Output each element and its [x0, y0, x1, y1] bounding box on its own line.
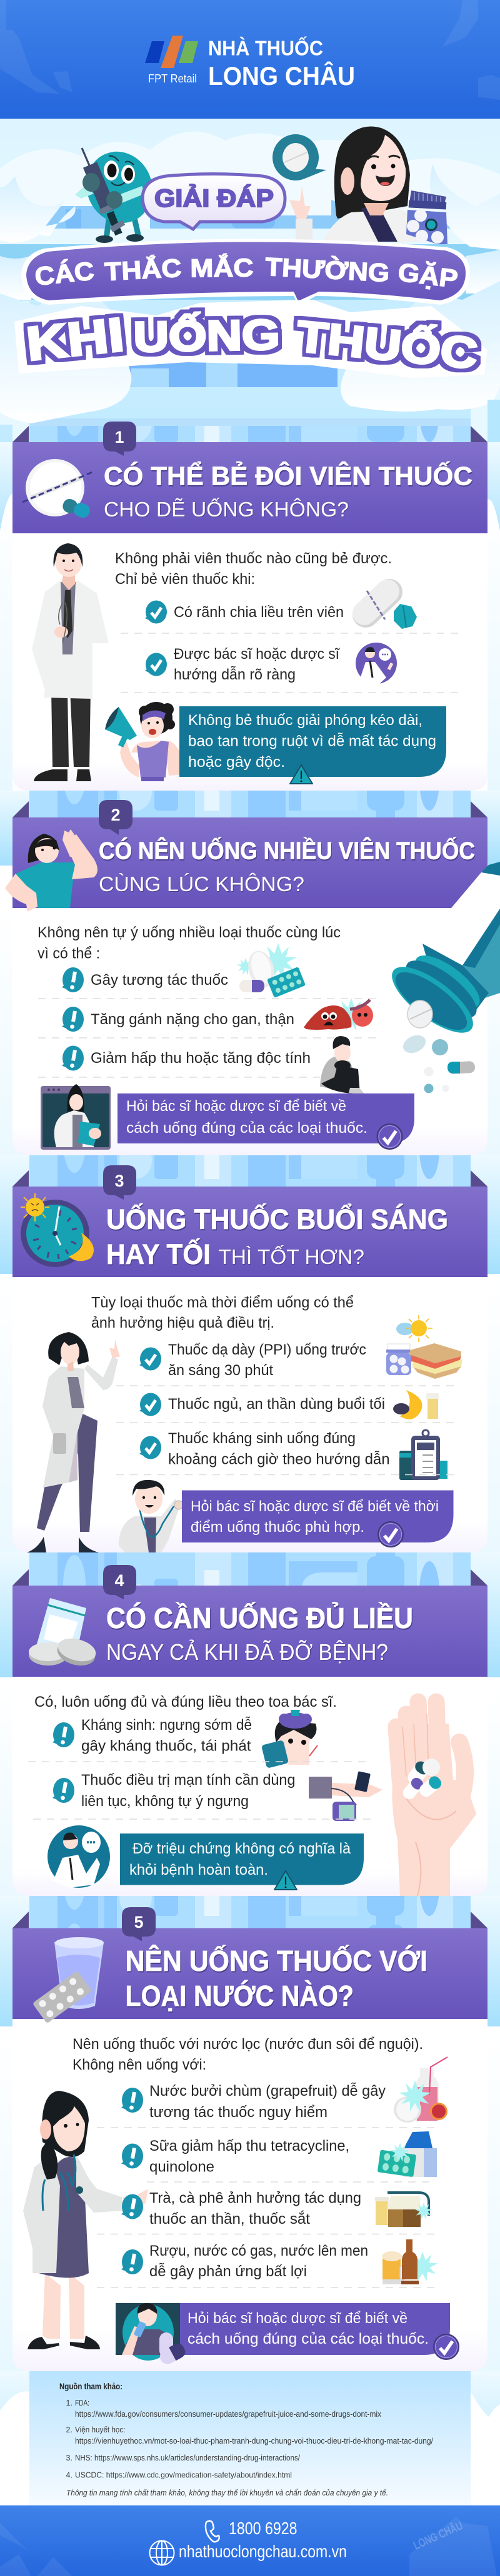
- illustration: sick man with ice bag: [261, 1710, 318, 1769]
- references panel: https://www.fda.gov/consumers/consumer-updates/grapefruit-juice-and-some-drugs-dont-mix: [75, 2410, 382, 2419]
- footer band: [0, 2505, 500, 2576]
- illustration: small doctor with stethoscope: [119, 1480, 183, 1552]
- logo: FPT Retail: FPT Retail: [148, 72, 197, 85]
- intro text 2: [38, 924, 341, 962]
- icon: teal doctor circle: [48, 1825, 110, 1888]
- callout: hỏi bác sĩ (3): [182, 1490, 454, 1547]
- illustration: female doctor pointing: [27, 1332, 120, 1552]
- callout: hỏi bác sĩ (3): Hỏi bác sĩ hoặc dược sĩ để biết về thời: [191, 1498, 439, 1515]
- callout: hỏi bác sĩ (2): cách uống đúng của các loại thuốc.: [126, 1120, 368, 1137]
- list item: rãnh chia liều: [145, 601, 344, 623]
- callout: hỏi bác sĩ (5): cách uống đúng của các loại thuốc.: [188, 2331, 429, 2347]
- intro text 2: Không nên tự ý uống nhiều loại thuốc cùng lúc: [38, 924, 341, 941]
- callout: hỏi bác sĩ (5): Hỏi bác sĩ hoặc dược sĩ để biết về: [188, 2310, 408, 2327]
- intro text 1: [115, 550, 392, 588]
- icon: clock with sun and moon: [21, 1193, 94, 1267]
- illustration: blood pressure cuff: [309, 1771, 382, 1821]
- intro text 5: Không nên uống với:: [72, 2056, 206, 2073]
- phone number: 1800 6928: [229, 2519, 298, 2538]
- list item: tương tác thuốc: [62, 967, 228, 992]
- panel 5: loại nước nào: [12, 1907, 488, 2371]
- dashed dividers: [38, 999, 378, 1077]
- callout: không bẻ thuốc giải phóng kéo dài: bao tan trong ruột vì dễ mất tác dụng: [188, 733, 436, 749]
- heading 3: THÌ TỐT HƠN?: [219, 1245, 364, 1268]
- illustration: pill character with syringe: [75, 142, 163, 243]
- list item: sữa: quinolone: [149, 2158, 214, 2176]
- number badge 1: [103, 422, 136, 456]
- title banner: CÁC THẮC MẮC THƯỜNG GẶP: THƯỜNG: [264, 252, 390, 287]
- list item: độc tính: [62, 1045, 311, 1070]
- references panel: https://vienhuyethoc.vn/mot-so-loai-thuc-pham-tranh-dung-chung-voi-thuoc-dieu-tri-de-khong-mat-tac-dung/: [75, 2437, 433, 2445]
- logo: FPT Retail: [145, 36, 198, 85]
- list item: kháng sinh: khoảng cách giờ theo hướng dẫn: [168, 1451, 390, 1468]
- dashed dividers: [97, 2128, 436, 2287]
- brand name: [208, 36, 355, 91]
- number badge 3: 3: [114, 1172, 124, 1190]
- intro text 4: Có, luôn uống đủ và đúng liều theo toa bác sĩ.: [34, 1694, 337, 1710]
- title banner: CÁC THẮC MẮC THƯỜNG GẶP: [21, 239, 470, 306]
- illustration: open hand with pills: [392, 1702, 476, 1896]
- intro text 1: Không phải viên thuốc nào cũng bẻ được.: [115, 550, 392, 567]
- references panel: 4.: [66, 2470, 72, 2479]
- number badge 1: 1: [114, 428, 124, 447]
- icon: coffee pot and vial: [375, 2193, 432, 2227]
- number badge 4: 4: [114, 1571, 124, 1590]
- badge: GIẢI ĐÁP: GIẢI ĐÁP: [154, 184, 274, 212]
- list item: thuốc ngủ: [139, 1393, 385, 1416]
- list item: kháng sinh ngưng sớm: Kháng sinh: ngưng sớm dễ: [81, 1717, 252, 1734]
- list item: kháng sinh: [139, 1430, 390, 1468]
- list item: trà cà phê: [121, 2189, 361, 2228]
- heading 4: [106, 1602, 413, 1665]
- main title: KHI UỐNG THUỐC: [14, 300, 488, 378]
- icon: glass of water and blister: [32, 1937, 104, 2023]
- intro text 3: Tùy loại thuốc mà thời điểm uống có thể: [91, 1294, 354, 1311]
- callout: không bẻ thuốc giải phóng kéo dài: Không bẻ thuốc giải phóng kéo dài,: [188, 712, 422, 729]
- callout: hỏi bác sĩ (2): [118, 1093, 414, 1149]
- references panel: FDA:: [75, 2399, 89, 2407]
- icon: sun, bottle and sandwich: [386, 1315, 462, 1379]
- list item: bưởi chùm: tương tác thuốc nguy hiểm: [149, 2104, 328, 2121]
- references panel: Nguồn tham khảo:: [59, 2381, 122, 2391]
- list item: bệnh mạn tính: [52, 1772, 295, 1810]
- number badge 4: [103, 1565, 136, 1599]
- references panel: NHS: https://www.sps.nhs.uk/articles/understanding-drug-interactions/: [75, 2454, 300, 2462]
- illustration: woman with megaphone: [105, 702, 185, 781]
- list item: bưởi chùm: Nước bưởi chùm (grapefruit) dễ gây: [149, 2083, 386, 2100]
- icon: interacting pills: [237, 943, 306, 998]
- intro text 3: [91, 1294, 354, 1331]
- number badge 2: 2: [111, 806, 121, 824]
- main title: KHI UỐNG THUỐC: UỐNG: [133, 310, 280, 361]
- list item: trà cà phê: Trà, cà phê ảnh hưởng tác dụng: [149, 2189, 361, 2207]
- number badge 3: [103, 1165, 136, 1200]
- title banner: CÁC THẮC MẮC THƯỜNG GẶP: GẶP: [396, 257, 459, 294]
- panel 2: uống nhiều viên thuốc: [5, 800, 488, 1155]
- list item: bác sĩ hướng dẫn: Được bác sĩ hoặc dược sĩ: [174, 646, 340, 663]
- dashed dividers: [116, 1386, 456, 1475]
- heading 2: CÙNG LÚC KHÔNG?: [99, 872, 304, 896]
- callout: đỡ triệu chứng: [120, 1833, 364, 1890]
- heading 5: NÊN UỐNG THUỐC VỚI: [125, 1945, 428, 1977]
- illustration: tipped bottle with pills: [382, 862, 500, 1093]
- references panel: USCDC: https://www.cdc.gov/medication-safety/about/index.html: [75, 2470, 292, 2479]
- list item: trà cà phê: thuốc an thần, thuốc sắt: [149, 2211, 310, 2228]
- badge: GIẢI ĐÁP: [142, 174, 285, 229]
- icon: split tablet and capsule: [22, 459, 94, 520]
- list item: PPI: [139, 1341, 366, 1379]
- list item: gan thận: [62, 1007, 294, 1032]
- list item: kháng sinh: Thuốc kháng sinh uống đúng: [168, 1430, 356, 1447]
- main title: KHI UỐNG THUỐC: KHI: [24, 308, 126, 371]
- callout: đỡ triệu chứng: Đỡ triệu chứng không có nghĩa là: [132, 1840, 351, 1857]
- list item: bác sĩ hướng dẫn: [145, 646, 340, 683]
- icon: globe: [150, 2540, 174, 2565]
- list item: rãnh chia liều: Có rãnh chia liều trên viên: [174, 604, 344, 621]
- illustration: pharmacist woman: [289, 126, 431, 242]
- list item: bệnh mạn tính: liên tục, không tự ý ngưng: [81, 1793, 249, 1810]
- icon: milk carton and blister: [378, 2131, 437, 2177]
- heading 3: [106, 1203, 448, 1270]
- list item: sữa: Sữa giảm hấp thu tetracycline,: [149, 2138, 349, 2154]
- shop sign: LONG CHÂU: [411, 2519, 465, 2553]
- list item: kháng sinh ngưng sớm: [52, 1717, 252, 1755]
- references panel: 1.: [66, 2399, 72, 2407]
- heading 3: HAY TỐI: [106, 1238, 211, 1270]
- heading 4: CÓ CẦN UỐNG ĐỦ LIỀU: [106, 1602, 413, 1634]
- heading 2: [99, 837, 475, 896]
- references panel: Viện huyết học:: [75, 2425, 125, 2434]
- list item: PPI: Thuốc dạ dày (PPI) uống trước: [168, 1341, 366, 1358]
- list item: gan thận: Tăng gánh nặng cho gan, thận: [91, 1011, 294, 1028]
- dashed dividers: [28, 1762, 372, 1819]
- icon: clipboard and medicine: [399, 1430, 448, 1480]
- references panel: [29, 2371, 471, 2505]
- brand name: LONG CHÂU: [208, 61, 355, 91]
- intro text 1: Chỉ bẻ viên thuốc khi:: [115, 571, 255, 588]
- number badge 5: 5: [134, 1913, 144, 1932]
- heading 5: LOẠI NƯỚC NÀO?: [125, 1980, 354, 2012]
- callout: hỏi bác sĩ (5): [116, 2303, 459, 2367]
- website: nhathuoclongchau.com.vn: [179, 2542, 347, 2561]
- list item: thuốc ngủ: Thuốc ngủ, an thần dùng buổi tối: [168, 1396, 385, 1413]
- list item: tương tác thuốc: Gây tương tác thuốc: [91, 972, 228, 989]
- icon: beer and bottle: [382, 2239, 438, 2284]
- header band: [0, 0, 500, 119]
- panel 3: buổi sáng hay tối: [12, 1165, 488, 1552]
- list item: rượu: dễ gây phản ứng bất lợi: [149, 2263, 307, 2280]
- heading 1: CÓ THỂ BẺ ĐÔI VIÊN THUỐC: [104, 461, 472, 491]
- list item: kháng sinh ngưng sớm: gây kháng thuốc, tái phát: [81, 1737, 251, 1755]
- panel 1: bẻ đôi viên thuốc: [12, 422, 488, 791]
- list item: bệnh mạn tính: Thuốc điều trị mạn tính cần dùng: [81, 1772, 295, 1789]
- dashed dividers: [121, 633, 461, 693]
- heading 3: UỐNG THUỐC BUỔI SÁNG: [106, 1203, 448, 1235]
- brand name: NHÀ THUỐC: [208, 36, 323, 60]
- callout: hỏi bác sĩ (2): Hỏi bác sĩ hoặc dược sĩ để biết về: [126, 1098, 346, 1115]
- illustration: male doctor: [32, 543, 109, 781]
- illustration: doctor woman presenting: [23, 2091, 148, 2349]
- list item: rượu: Rượu, nước có gas, nước lên men: [149, 2243, 368, 2259]
- heading 4: NGAY CẢ KHI ĐÃ ĐỠ BỆNH?: [106, 1639, 388, 1665]
- callout: không bẻ thuốc giải phóng kéo dài: [179, 706, 446, 784]
- references panel: 3.: [66, 2454, 72, 2462]
- list item: rượu: [121, 2243, 368, 2280]
- illustration: pill bottle: [406, 190, 448, 244]
- icon: medicine bag and tablets: [29, 1598, 98, 1669]
- intro text 3: ảnh hưởng hiệu quả điều trị.: [91, 1315, 274, 1331]
- speech bubble: pill: [272, 134, 326, 180]
- number badge 5: [122, 1907, 156, 1941]
- heading 1: CHO DẼ UỐNG KHÔNG?: [104, 497, 349, 521]
- title banner: CÁC THẮC MẮC THƯỜNG GẶP: CÁC: [33, 256, 96, 291]
- illustration: woman raising hand: [5, 829, 98, 912]
- references panel: 2.: [66, 2425, 72, 2434]
- number badge 2: [99, 800, 132, 835]
- icon: phone: [206, 2521, 219, 2542]
- callout: đỡ triệu chứng: khỏi bệnh hoàn toàn.: [129, 1862, 268, 1878]
- list item: sữa: [121, 2138, 349, 2176]
- intro text 5: [72, 2036, 423, 2073]
- intro text 5: Nên uống thuốc với nước lọc (nước đun sôi để nguội).: [72, 2036, 423, 2053]
- title banner: CÁC THẮC MẮC THƯỜNG GẶP: THẮC: [104, 254, 182, 286]
- callout: không bẻ thuốc giải phóng kéo dài: hoặc gây độc.: [188, 754, 285, 771]
- title banner: CÁC THẮC MẮC THƯỜNG GẶP: MẮC: [190, 254, 254, 282]
- illustration: tablet doctor: [41, 1084, 111, 1150]
- icon: scored tablet: [364, 591, 417, 629]
- panel 4: uống đủ liều: [12, 1565, 488, 1896]
- icon: doctor in circle: [356, 643, 397, 684]
- list item: độc tính: Giảm hấp thu hoặc tăng độc tính: [91, 1050, 311, 1067]
- intro text 2: vì có thể :: [38, 945, 100, 962]
- references panel: Thông tin mang tính chất tham khảo, không thay thế lời khuyên và chẩn đoán của chuyên gia y tế.: [66, 2489, 388, 2497]
- icon: grapefruit juice: [394, 2057, 448, 2123]
- icon: moon and vial: [393, 1390, 439, 1419]
- list item: bưởi chùm: [121, 2083, 386, 2121]
- list item: PPI: ăn sáng 30 phút: [168, 1362, 273, 1379]
- main title: KHI UỐNG THUỐC: THUỐC: [294, 311, 480, 378]
- callout: hỏi bác sĩ (3): điểm uống thuốc phù hợp.: [191, 1519, 364, 1536]
- list item: bác sĩ hướng dẫn: hướng dẫn rõ ràng: [174, 666, 296, 683]
- sky background with clouds and city: [0, 119, 500, 493]
- heading 1: [104, 461, 472, 521]
- heading 5: [125, 1945, 428, 2012]
- icon: liver and kidney: [304, 998, 373, 1030]
- illustration: sad man sitting: [320, 1036, 366, 1095]
